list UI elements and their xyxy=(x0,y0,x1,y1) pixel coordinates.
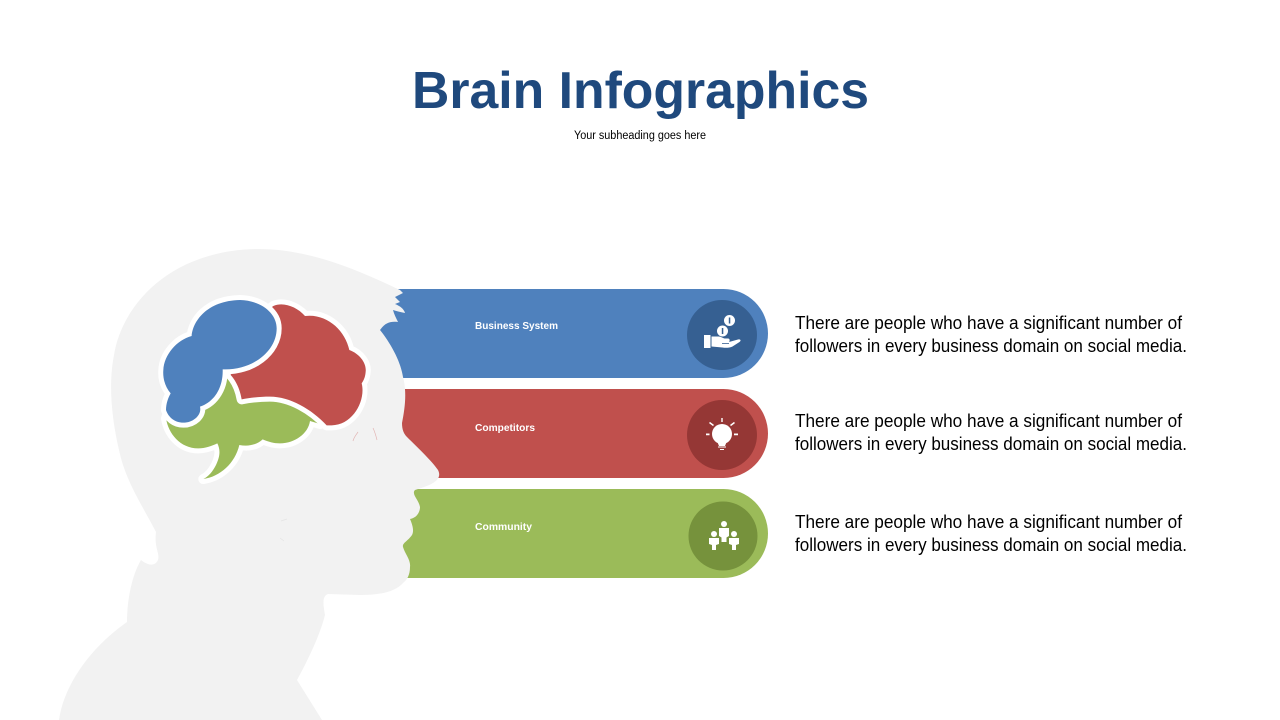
text block: business system: followers in every business domain on social media. xyxy=(795,336,1187,356)
text block: competitors xyxy=(795,411,1187,454)
title: Brain Infographics xyxy=(412,62,869,120)
icon: three people xyxy=(688,502,758,570)
text block: community: followers in every business domain on social media. xyxy=(795,535,1187,555)
text block: business system xyxy=(795,313,1187,356)
icon: light bulb xyxy=(687,400,757,470)
brain: blue lobe xyxy=(163,300,277,423)
text block: community xyxy=(795,512,1187,555)
text block: community: There are people who have a significant number of xyxy=(795,512,1183,532)
text block: competitors: There are people who have a significant number of xyxy=(795,411,1183,431)
text block: business system: There are people who have a significant number of xyxy=(795,313,1183,333)
head silhouette xyxy=(59,249,439,720)
text block: competitors: followers in every business domain on social media. xyxy=(795,434,1187,454)
panel: community bar xyxy=(370,489,768,578)
brain: green lobe xyxy=(166,373,320,479)
faint face marks xyxy=(280,428,377,541)
brain: red lobe xyxy=(231,304,366,425)
panel: competitors bar xyxy=(370,389,768,478)
panel: business system bar xyxy=(370,289,768,378)
label: community: Community xyxy=(475,521,532,533)
icon: hand with coins xyxy=(687,300,757,370)
label: competitors: Competitors xyxy=(475,422,535,434)
subheading: Your subheading goes here xyxy=(574,130,706,142)
label: business system: Business System xyxy=(475,320,558,332)
brain illustration xyxy=(163,300,366,479)
